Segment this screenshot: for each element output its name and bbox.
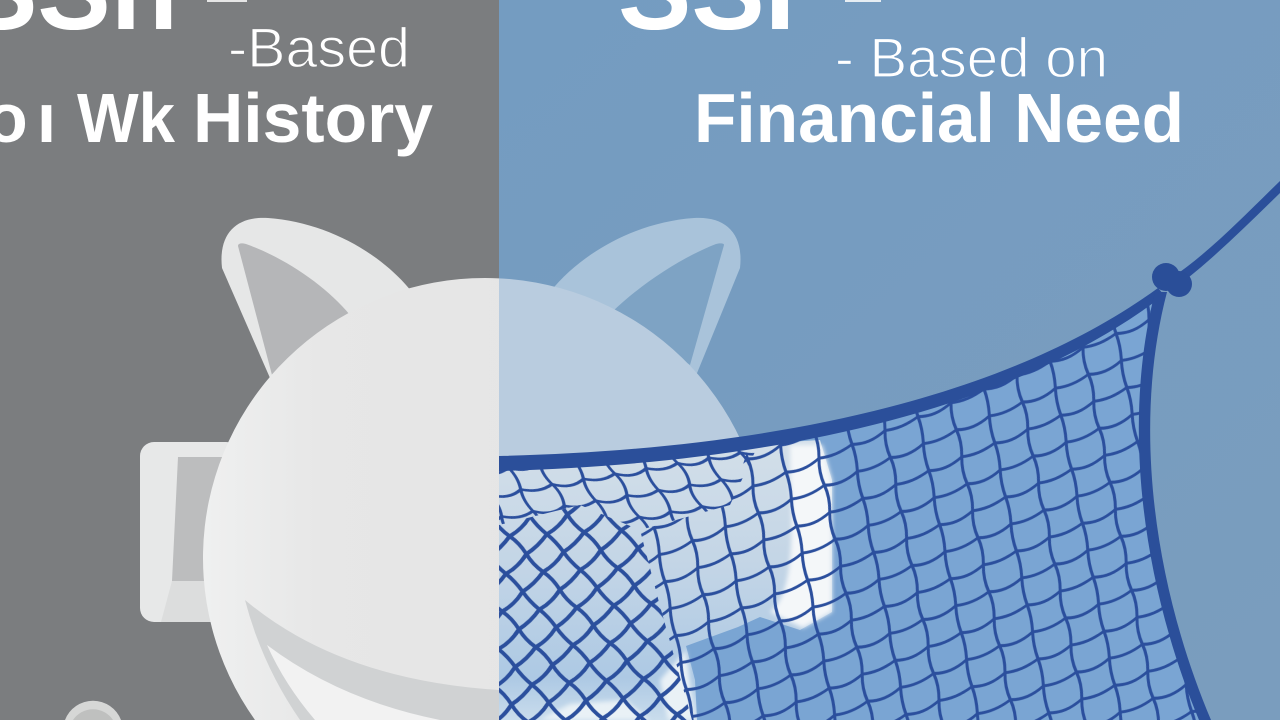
piggy snout left half (140, 442, 228, 622)
subtitle: Based: -Based (228, 16, 410, 79)
piggy ear right (550, 218, 741, 378)
piggy bank illustration (140, 218, 767, 720)
net highlight (770, 445, 832, 628)
panel: left grey background (0, 0, 499, 720)
safety net (499, 181, 1280, 720)
piggy body blue half (499, 278, 739, 456)
title accent (845, 0, 881, 2)
net side rope (1139, 292, 1211, 720)
left coin circle (65, 701, 121, 720)
subtitle: Financial Need: Financial Need (694, 79, 1184, 157)
title accent (207, 0, 247, 2)
piggy ear left (221, 218, 412, 378)
mesh: top band (499, 450, 754, 528)
right heading (618, 0, 1184, 157)
net rope to right edge (1170, 181, 1280, 287)
net backing (499, 292, 1205, 720)
lower patches (540, 650, 695, 720)
object behind net (499, 306, 1196, 720)
subtitle: Wk: Wk (77, 79, 175, 157)
piggy body grey half (203, 278, 499, 720)
mesh: diamonds (499, 505, 692, 720)
subtitle: History: History (193, 79, 433, 157)
subtitle: Based on: - Based on (835, 26, 1108, 89)
panel: right blue background (499, 0, 1280, 720)
mesh: regular (641, 306, 1196, 720)
net knot (1152, 263, 1192, 297)
left heading (0, 0, 410, 157)
net top rope (499, 288, 1164, 471)
